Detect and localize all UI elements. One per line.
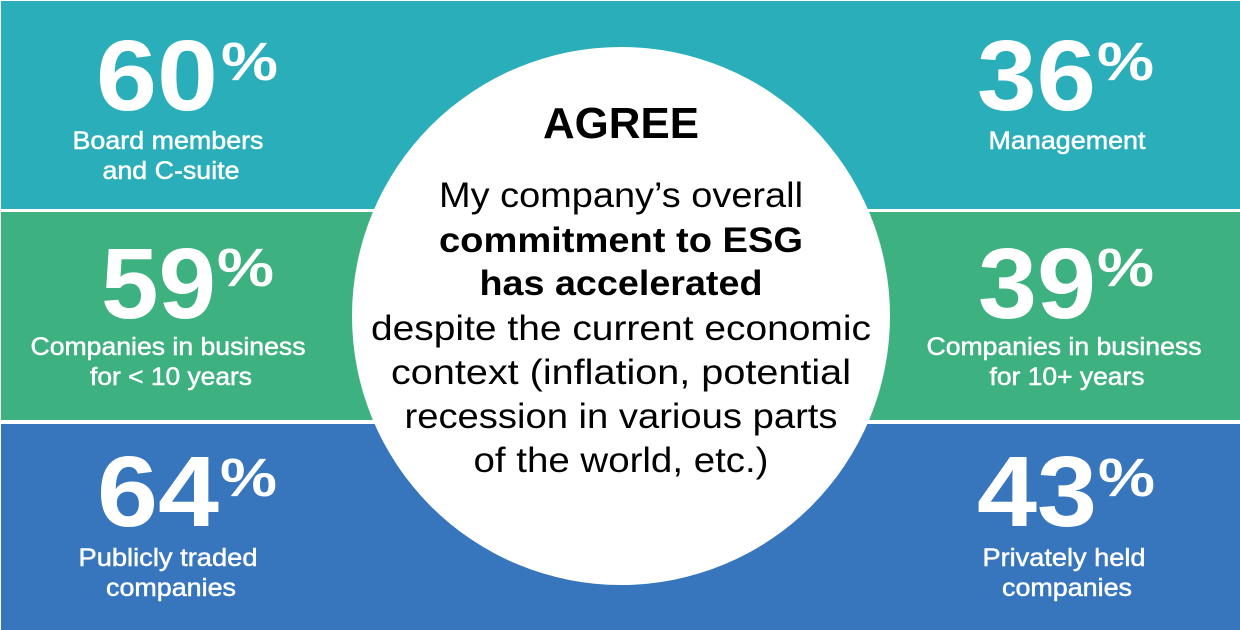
stat: board members 60%: Board members	[72, 127, 264, 155]
stat: privately held 43%: 43	[977, 436, 1097, 548]
stat: publicly traded 64%: 64	[97, 436, 219, 548]
stat: board members 60%: and C-suite	[102, 157, 240, 185]
stat: companies under 10 years 59%: %	[217, 238, 274, 298]
stat: publicly traded 64%: companies	[106, 574, 236, 602]
stat: companies under 10 years 59%: 59	[101, 228, 216, 340]
heading: agree: AGREE	[543, 99, 699, 148]
statement text: context (inflation, potential	[391, 353, 851, 392]
stat: privately held 43%: %	[1098, 448, 1155, 508]
statement text	[371, 176, 871, 480]
statement text: of the world, etc.)	[474, 441, 768, 480]
stat: companies 10+ years 39%: Companies in business	[926, 333, 1202, 361]
stat: publicly traded 64%: %	[220, 448, 277, 508]
statement text: has accelerated	[480, 264, 762, 303]
statement text: recession in various parts	[404, 397, 838, 436]
stat: publicly traded 64%: Publicly traded	[78, 544, 258, 572]
stat: management 36%: 36	[977, 20, 1096, 132]
band: blue row	[1, 424, 1240, 630]
band: teal row	[1, 1, 1240, 209]
stat: companies under 10 years 59%: for < 10 years	[90, 363, 252, 391]
stat: privately held 43%: Privately held	[982, 544, 1146, 572]
stat: companies 10+ years 39%	[926, 228, 1202, 391]
stat: management 36%: %	[1097, 32, 1154, 92]
statement text: despite the current economic	[371, 309, 871, 348]
stat: companies 10+ years 39%: %	[1097, 238, 1154, 298]
stat: board members 60%: 60	[96, 20, 218, 132]
stat: companies under 10 years 59%: Companies in business	[30, 333, 306, 361]
center circle	[352, 47, 890, 585]
statement text: My company’s overall	[439, 176, 803, 215]
stat: companies 10+ years 39%: 39	[978, 228, 1096, 340]
band: green row	[1, 212, 1240, 420]
stat: management 36%: Management	[988, 127, 1146, 155]
stat: publicly traded 64%	[78, 436, 277, 602]
stat: companies 10+ years 39%: for 10+ years	[990, 363, 1144, 391]
stat: privately held 43%: companies	[1002, 574, 1132, 602]
stat: board members 60%	[72, 20, 278, 185]
stat: companies under 10 years 59%	[30, 228, 306, 391]
stat: privately held 43%	[977, 436, 1155, 602]
stat: management 36%	[977, 20, 1154, 155]
stat: board members 60%: %	[221, 32, 278, 92]
statement text: commitment to ESG	[439, 221, 803, 260]
